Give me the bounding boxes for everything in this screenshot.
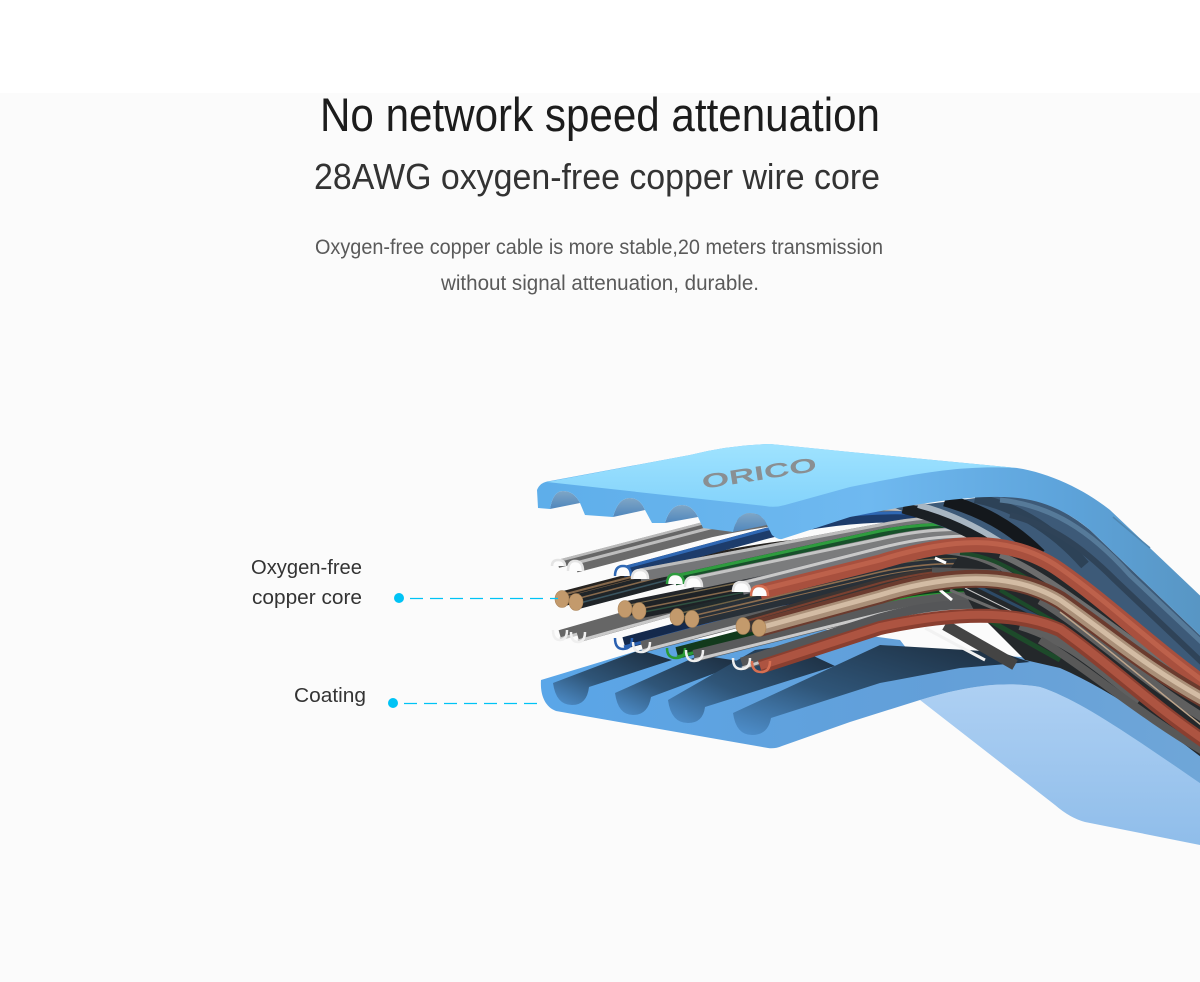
label text — [251, 557, 362, 609]
callout dot — [394, 593, 404, 603]
title: No network speed attenuation — [320, 88, 880, 141]
description text — [315, 236, 883, 295]
description text: Oxygen-free copper cable is more stable,20 meters transmission — [315, 236, 883, 259]
label: oxygen-free copper core — [251, 557, 558, 609]
subtitle: 28AWG oxygen-free copper wire core — [314, 156, 880, 197]
callout line — [404, 702, 541, 704]
wires: column 1 — [558, 504, 946, 642]
label: coating — [294, 685, 541, 708]
upper coating arch shading — [550, 491, 767, 532]
callout dot — [388, 698, 398, 708]
wire sheath tips: upper row — [552, 560, 768, 596]
bend: strands between beige and lower red wires — [940, 574, 1200, 745]
brand logo: ORICO — [700, 454, 818, 494]
bend: slate band below top coating — [895, 495, 1200, 690]
copper conductor ends — [555, 590, 766, 636]
label text: copper core — [252, 587, 362, 609]
flat cable cutaway illustration — [537, 444, 1200, 847]
wires: column 2 — [622, 511, 932, 652]
upper coating top surface — [547, 444, 1017, 507]
label text: Coating — [294, 685, 366, 707]
wire sheath tips: lower row — [553, 630, 770, 672]
wires: column 3 — [676, 523, 968, 661]
callout line — [410, 598, 558, 600]
bend: strands below lower red wire — [925, 610, 1200, 764]
upper coating body — [537, 444, 1200, 645]
bend: strands between top red and beige wires — [932, 545, 1200, 702]
main wires: red, beige, red — [759, 543, 1200, 745]
lower coating body — [541, 628, 1200, 790]
upper coating side groove — [1113, 517, 1150, 548]
wires: column 4 back — [740, 534, 973, 670]
description text: without signal attenuation, durable. — [440, 272, 759, 295]
lower coating underside — [920, 684, 1200, 847]
lower coating channels — [553, 645, 1030, 735]
label text: Oxygen-free — [251, 557, 362, 579]
